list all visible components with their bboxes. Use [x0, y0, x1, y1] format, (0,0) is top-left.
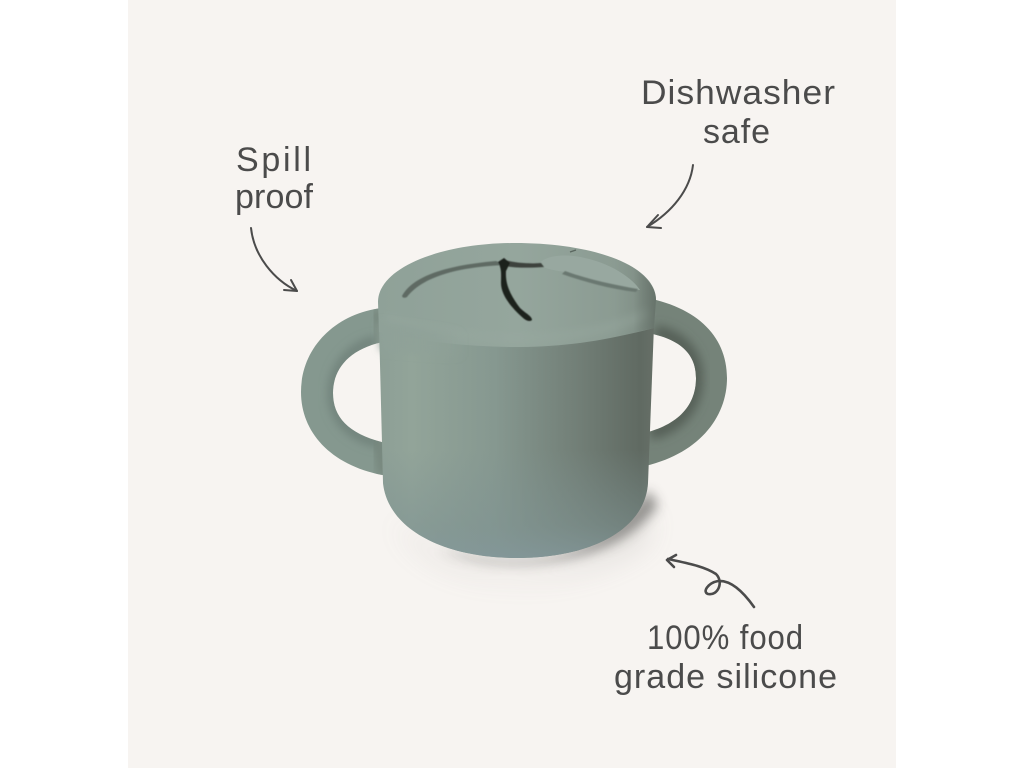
center slit — [498, 258, 532, 321]
label: spill proof: proof — [235, 178, 314, 216]
label: spill proof: Spill — [236, 141, 312, 179]
arrow: spill proof — [251, 228, 297, 291]
lid slits — [402, 258, 638, 321]
arrow: food grade silicone — [667, 555, 754, 607]
left handle — [301, 308, 383, 476]
lid flap mark — [570, 250, 576, 252]
label: dishwasher safe — [641, 74, 836, 151]
wide soft shadow — [395, 510, 650, 577]
label: food grade silicone: grade silicone — [614, 658, 838, 696]
label: food grade silicone: 100% food — [647, 619, 804, 657]
contact shadow — [440, 490, 658, 564]
label: spill proof — [235, 141, 314, 216]
lid to body blend on the left — [379, 322, 520, 362]
lid — [378, 243, 656, 347]
cup base tint — [383, 450, 649, 558]
infographic canvas — [128, 0, 896, 768]
label: dishwasher safe: Dishwasher — [641, 74, 836, 112]
cup body — [379, 325, 654, 558]
right handle — [648, 300, 727, 466]
label: food grade silicone — [614, 619, 838, 696]
snack cup — [295, 243, 735, 577]
lid lower band highlight — [385, 312, 650, 338]
background panel — [128, 0, 896, 768]
lid flap — [540, 256, 640, 290]
arrow: dishwasher safe — [647, 165, 693, 228]
left slit — [402, 261, 506, 298]
right handle inner shading — [650, 332, 696, 433]
right slit under flap — [505, 260, 544, 268]
left handle inner shading — [333, 341, 381, 443]
lid right falloff — [600, 252, 656, 340]
label: dishwasher safe: safe — [703, 113, 771, 151]
